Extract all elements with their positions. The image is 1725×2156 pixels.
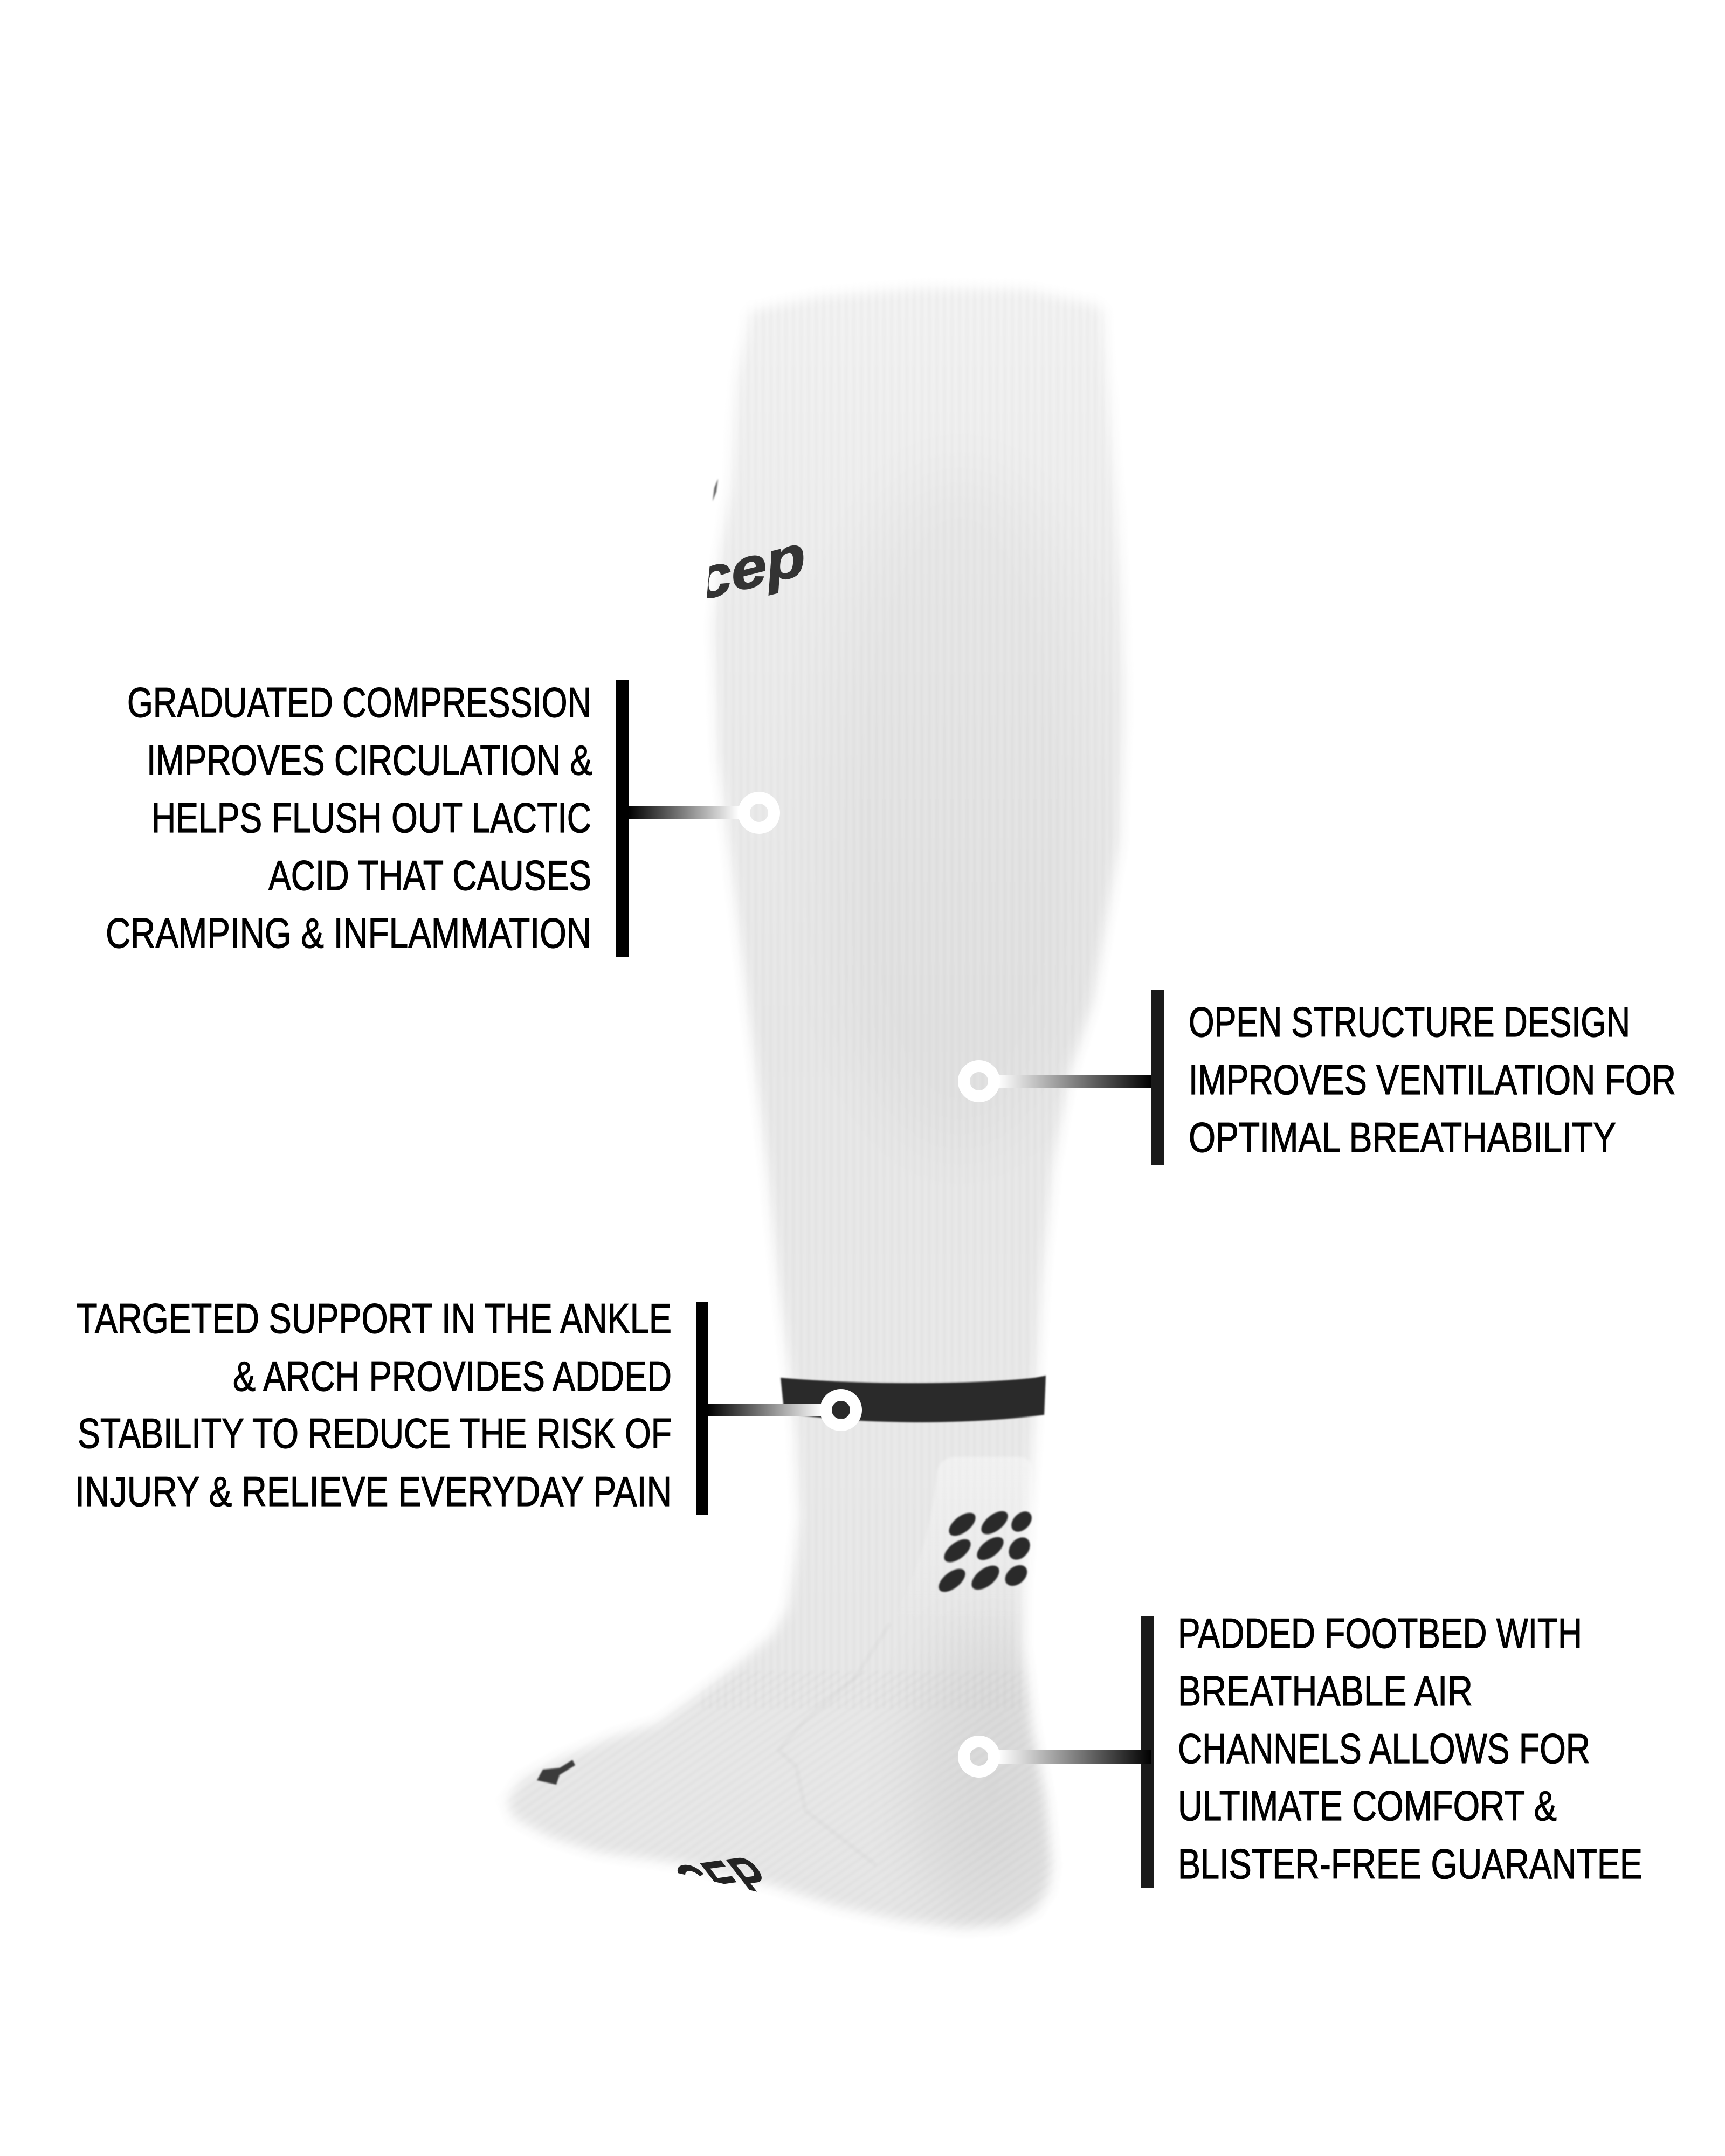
bracket bar [616, 680, 629, 957]
text: targeted support: & ARCH PROVIDES ADDED [233, 1352, 672, 1400]
connector arrow [998, 1750, 1151, 1764]
bracket bar [1151, 990, 1164, 1165]
text: targeted support: INJURY & RELIEVE EVERYDAY PAIN [75, 1468, 672, 1515]
text: targeted support: STABILITY TO REDUCE THE RISK OF [78, 1409, 672, 1457]
text: padded footbed: CHANNELS ALLOWS FOR [1178, 1725, 1590, 1772]
marker [964, 1066, 994, 1096]
sole logo: CEP [660, 1844, 788, 1917]
text: open structure design: OPTIMAL BREATHABILITY [1189, 1114, 1616, 1161]
heel panel [889, 1457, 1032, 1623]
foot seam [778, 1623, 890, 1865]
sock body [485, 275, 1137, 1940]
marker [826, 1395, 856, 1425]
connector arrow [708, 1404, 822, 1416]
icon: toe mark [537, 1760, 575, 1785]
callout: padded footbed [964, 1609, 1643, 1888]
bracket bar [1141, 1616, 1154, 1888]
marker [964, 1742, 994, 1772]
text: open structure design [1189, 998, 1676, 1161]
callout: open structure design [964, 990, 1676, 1165]
callout: graduated compression [106, 679, 774, 957]
text: graduated compression: HELPS FLUSH OUT LACTIC [151, 794, 591, 841]
side logo sliver [713, 479, 718, 501]
cep logo: cep [692, 523, 809, 613]
text: targeted support: TARGETED SUPPORT IN THE ANKLE [77, 1295, 672, 1342]
connector arrow [998, 1075, 1151, 1088]
bracket bar [696, 1302, 708, 1515]
text: padded footbed: BREATHABLE AIR [1178, 1667, 1473, 1715]
icon: heel dot grid [935, 1507, 1036, 1597]
text: graduated compression: IMPROVES CIRCULATION & [147, 736, 592, 784]
text: graduated compression: CRAMPING & INFLAMMATION [106, 909, 591, 957]
text: padded footbed: ULTIMATE COMFORT & [1178, 1782, 1557, 1829]
sock illustration [485, 275, 1137, 1940]
ankle band [781, 1376, 1046, 1422]
callout: targeted support [75, 1295, 856, 1515]
marker [744, 798, 774, 828]
text: padded footbed: PADDED FOOTBED WITH [1178, 1609, 1582, 1657]
text: graduated compression [106, 679, 592, 957]
text: graduated compression: GRADUATED COMPRESSION [127, 679, 591, 726]
text: graduated compression: ACID THAT CAUSES [268, 852, 591, 899]
text: targeted support [75, 1295, 672, 1515]
text: padded footbed [1178, 1609, 1643, 1888]
connector arrow [629, 806, 739, 819]
